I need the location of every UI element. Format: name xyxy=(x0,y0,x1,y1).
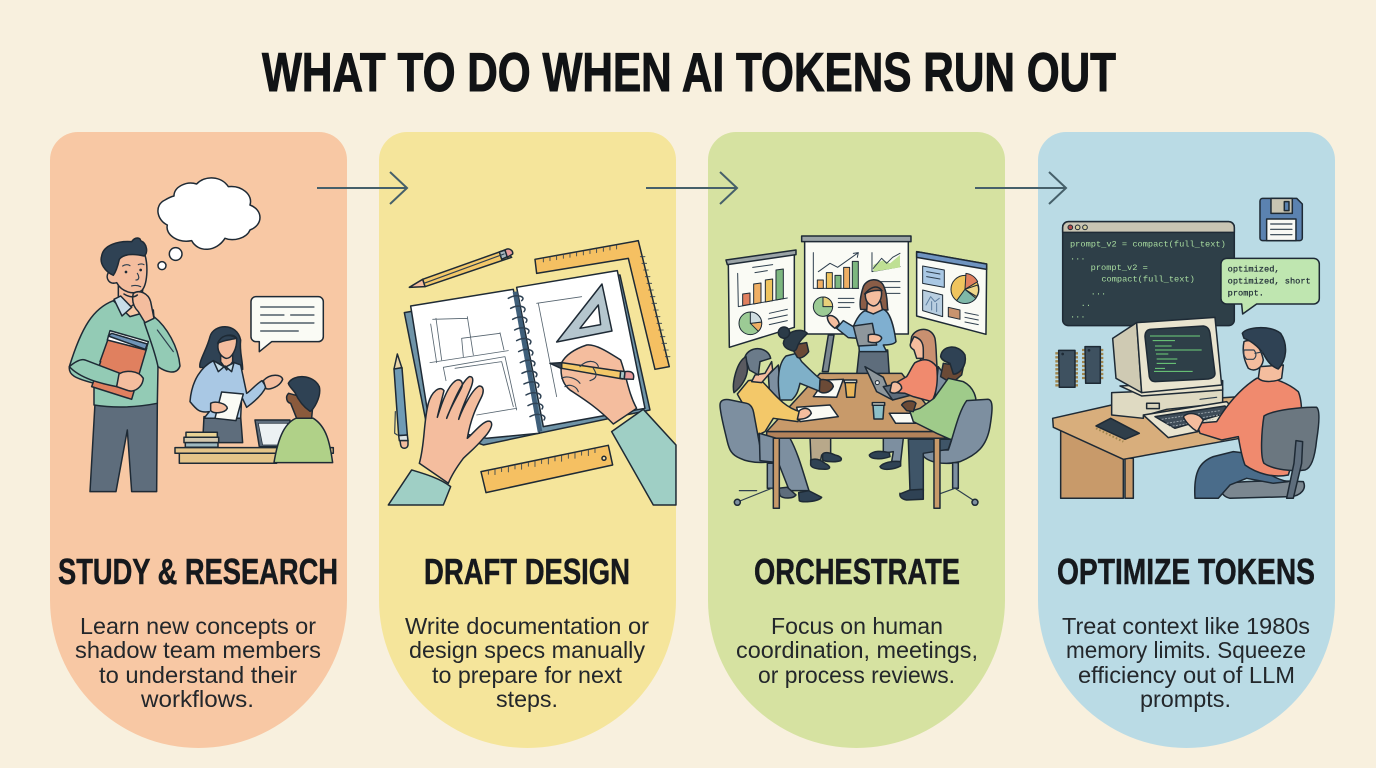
figure: seated colleague with laptop at desk xyxy=(175,377,333,463)
arrow: study to draft xyxy=(317,172,407,204)
description: coordination, meetings, xyxy=(736,637,978,663)
description: workflows. xyxy=(140,686,254,712)
table legs xyxy=(773,438,940,508)
figure: presenter xyxy=(827,280,896,375)
illustration: developer at retro computer xyxy=(1053,198,1319,498)
icon: floppy disk xyxy=(1260,198,1302,241)
description: to understand their xyxy=(99,662,297,688)
icon: L-square ruler xyxy=(535,241,670,369)
panel: orchestrate xyxy=(708,132,1005,748)
description: prompts. xyxy=(1140,686,1231,712)
illustration: hands drafting in notebook xyxy=(388,241,676,505)
icon: thought cloud xyxy=(158,178,260,270)
icon: open spiral notebook xyxy=(404,271,650,445)
figure: thinking man with books xyxy=(69,238,180,492)
arrow: draft to orchestrate xyxy=(646,172,737,204)
speech bubble: optimized, xyxy=(1228,265,1280,275)
icon: set square triangle xyxy=(557,284,612,342)
illustration: team meeting around table xyxy=(720,236,992,508)
description: design specs manually xyxy=(409,637,646,663)
icon: pencil xyxy=(409,249,513,287)
retro computer xyxy=(1112,317,1223,418)
easel leg xyxy=(822,335,834,372)
heading: STUDY & RESEARCH xyxy=(58,551,338,592)
figure: colleague with paper xyxy=(190,327,283,443)
description: shadow team members xyxy=(75,637,321,663)
icon: blue pen xyxy=(394,354,408,448)
panel: draft design xyxy=(379,132,676,748)
code window: ... xyxy=(1070,252,1086,262)
icon: flat hand xyxy=(388,377,492,505)
chart board: left xyxy=(726,250,796,347)
front chairs xyxy=(720,399,992,505)
description: Write documentation or xyxy=(405,613,649,639)
description xyxy=(1062,613,1310,712)
description: efficiency out of LLM xyxy=(1078,662,1295,688)
icon: speech bubble xyxy=(251,297,323,352)
heading: DRAFT DESIGN xyxy=(424,551,630,592)
icon: memory chips xyxy=(1055,347,1103,387)
code window: ... xyxy=(1091,287,1106,297)
description xyxy=(75,613,321,712)
description: or process reviews. xyxy=(758,662,955,688)
description: memory limits. Squeeze xyxy=(1066,637,1306,663)
items on table xyxy=(845,382,856,397)
description: Treat context like 1980s xyxy=(1062,613,1310,639)
code window: prompt_v2 = compact(full_text) xyxy=(1070,240,1226,250)
code window: .. xyxy=(1081,299,1091,309)
description: Focus on human xyxy=(771,613,943,639)
far legs: woman with bun and woman in orange xyxy=(810,437,903,469)
code window: prompt_v2 = xyxy=(1091,263,1148,273)
icon: bottom ruler xyxy=(481,445,613,493)
figure: woman in orange xyxy=(890,329,937,402)
arrow: orchestrate to optimize xyxy=(975,172,1066,204)
figure: developer xyxy=(1183,328,1319,498)
description: steps. xyxy=(496,686,558,712)
heading: ORCHESTRATE xyxy=(754,551,960,592)
code window: ... xyxy=(1070,311,1086,321)
table xyxy=(767,367,947,438)
code window xyxy=(1063,222,1234,326)
speech bubble: optimized, short xyxy=(1228,277,1311,287)
icon: laptop xyxy=(865,367,912,400)
keyboard xyxy=(1143,402,1237,438)
description: Learn new concepts or xyxy=(80,613,316,639)
chart board: centre xyxy=(802,236,911,334)
description xyxy=(736,613,978,688)
speech bubble xyxy=(1221,258,1319,314)
near legs: yellow woman and green man xyxy=(759,433,952,502)
code window: compact(full_text) xyxy=(1101,275,1195,285)
illustration: person thinking and colleagues talking xyxy=(69,178,333,492)
description xyxy=(405,613,649,712)
icon: drafting hand with pencil xyxy=(550,345,676,505)
figure: woman with bun xyxy=(778,327,833,400)
chairs behind xyxy=(768,365,782,403)
figure: man in green xyxy=(902,347,976,440)
title: WHAT TO DO WHEN AI TOKENS RUN OUT xyxy=(262,41,1116,103)
desk xyxy=(1053,397,1240,498)
panel: optimize tokens xyxy=(1038,132,1335,748)
panel: study and research xyxy=(50,132,347,748)
description: to prepare for next xyxy=(432,662,623,688)
chart window: right xyxy=(917,252,987,334)
speech bubble: prompt. xyxy=(1228,289,1264,299)
figure: woman in yellow with ponytail xyxy=(733,349,811,435)
